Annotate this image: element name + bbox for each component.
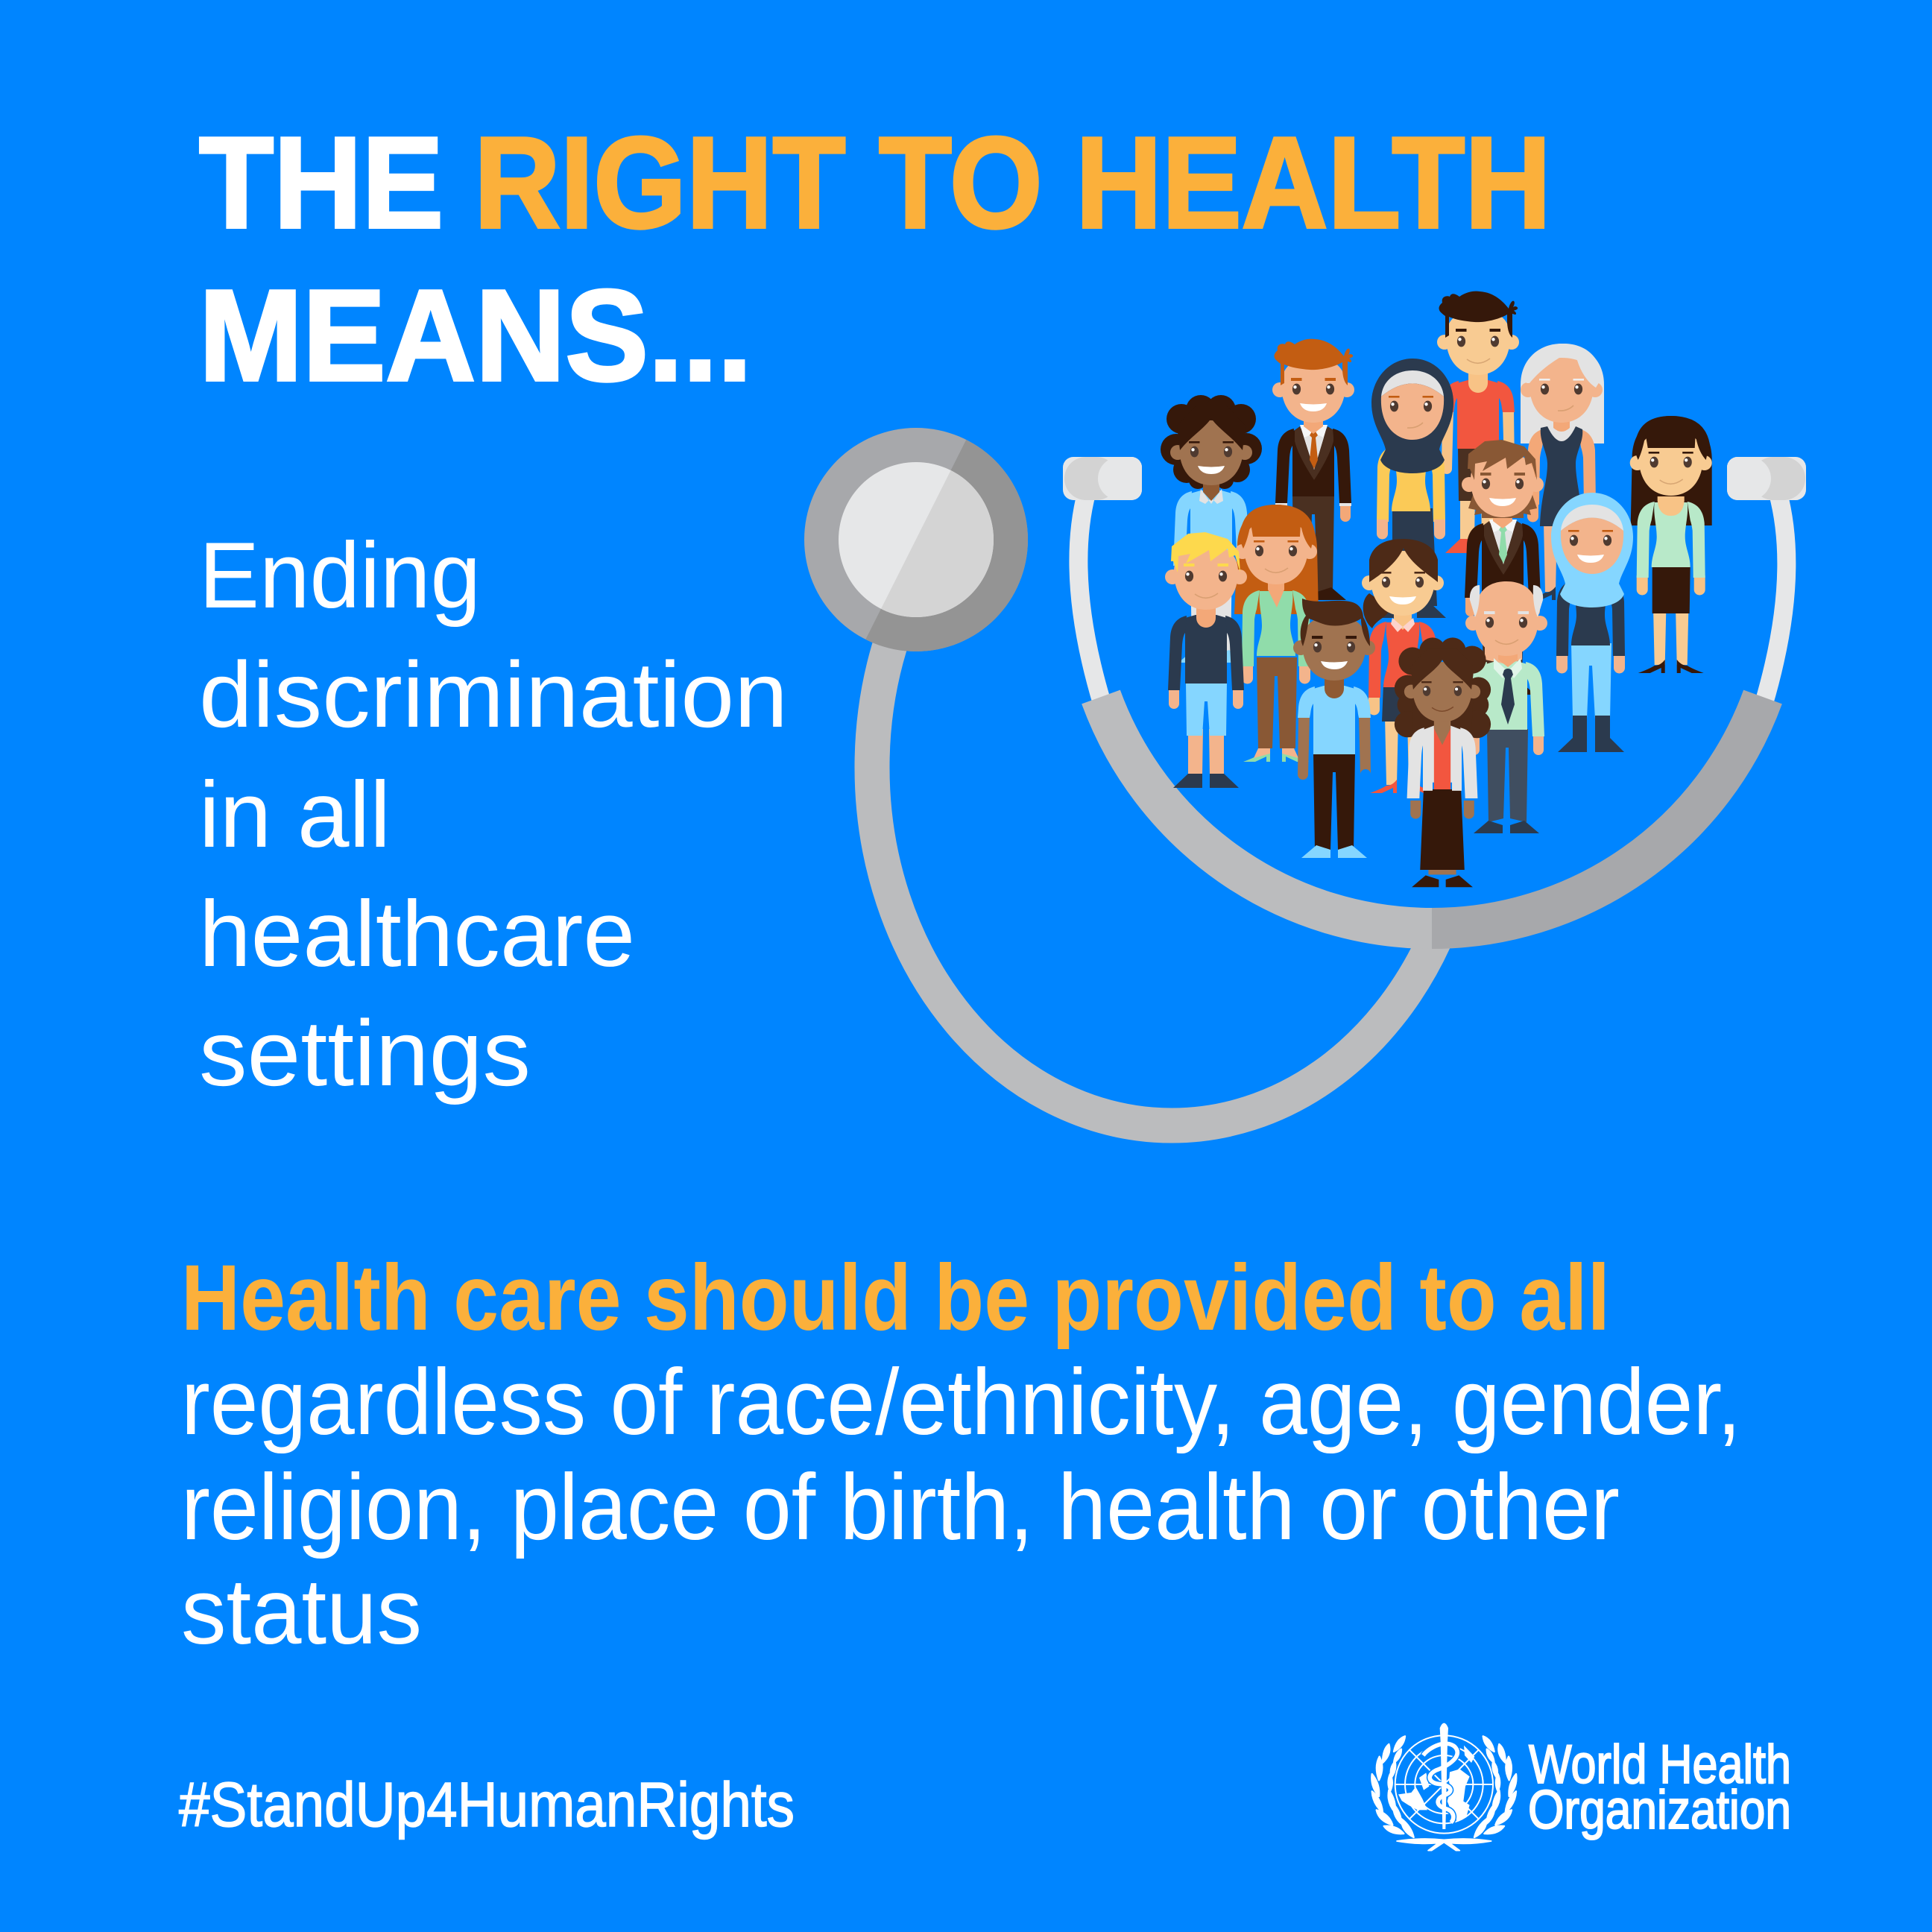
title: RIGHT TO HEALTH xyxy=(474,110,1551,255)
text block: ending discrimination: settings xyxy=(199,1002,531,1105)
text block: health care statement: status xyxy=(181,1560,422,1664)
ear tube left xyxy=(1079,492,1102,704)
organization name xyxy=(1528,1734,1791,1840)
icon: WHO emblem xyxy=(1371,1723,1516,1851)
person: girl with ponytail in red top xyxy=(1362,539,1444,793)
people group xyxy=(1161,291,1712,887)
person: boy in blue t-shirt xyxy=(1293,599,1375,858)
text block: health care statement: regardless of race/ethnicity, age, gender, xyxy=(181,1351,1741,1454)
text block: ending discrimination xyxy=(199,524,788,1105)
text block: health care statement: religion, place of birth, health or other xyxy=(181,1456,1620,1559)
title: MEANS... xyxy=(199,262,752,408)
text block: ending discrimination: discrimination xyxy=(199,643,788,747)
person: man in suit with brown hair xyxy=(1462,440,1544,695)
organization name: World Health xyxy=(1529,1734,1791,1795)
headset curve right xyxy=(1432,697,1763,929)
headset curve left xyxy=(1101,697,1432,929)
main tube xyxy=(872,634,1435,1126)
organization name: Organization xyxy=(1528,1780,1791,1840)
wreath left xyxy=(1371,1736,1414,1837)
person: curly-haired woman in blue sweater xyxy=(1161,395,1262,663)
person: woman with orange hair in green top xyxy=(1234,505,1319,762)
ear tip right xyxy=(1727,457,1806,500)
stethoscope xyxy=(804,428,1806,1126)
person: man in red shirt xyxy=(1437,291,1519,553)
ear tip left xyxy=(1063,457,1142,500)
title xyxy=(199,110,1551,408)
person: blond boy xyxy=(1165,532,1247,788)
text block: health care statement: Health care should be provided to all xyxy=(181,1246,1610,1350)
text block: ending discrimination: Ending xyxy=(199,524,481,628)
person: woman with long black hair xyxy=(1630,416,1712,673)
person: man in suit with red hair xyxy=(1272,339,1354,600)
person: woman in navy hijab xyxy=(1371,359,1453,618)
title: THE xyxy=(199,110,443,255)
person: grey-haired woman xyxy=(1521,344,1604,600)
chest piece xyxy=(804,428,1028,651)
text block: ending discrimination: in all xyxy=(199,763,391,867)
person: curly-haired woman in white cardigan xyxy=(1395,637,1491,887)
person: old man with tie xyxy=(1465,581,1547,833)
ear tube right xyxy=(1764,492,1787,704)
continents xyxy=(1398,1746,1474,1821)
snake xyxy=(1423,1743,1457,1822)
hashtag: #StandUp4HumanRights xyxy=(179,1770,795,1840)
staff xyxy=(1440,1723,1448,1829)
ribbon xyxy=(1397,1839,1491,1851)
logo: World Health Organization xyxy=(1371,1723,1791,1851)
globe xyxy=(1395,1735,1493,1834)
person: woman in light blue hijab xyxy=(1551,493,1633,752)
text block: health care statement xyxy=(181,1246,1741,1664)
text block: ending discrimination: healthcare xyxy=(199,883,635,986)
wreath right xyxy=(1474,1736,1516,1837)
